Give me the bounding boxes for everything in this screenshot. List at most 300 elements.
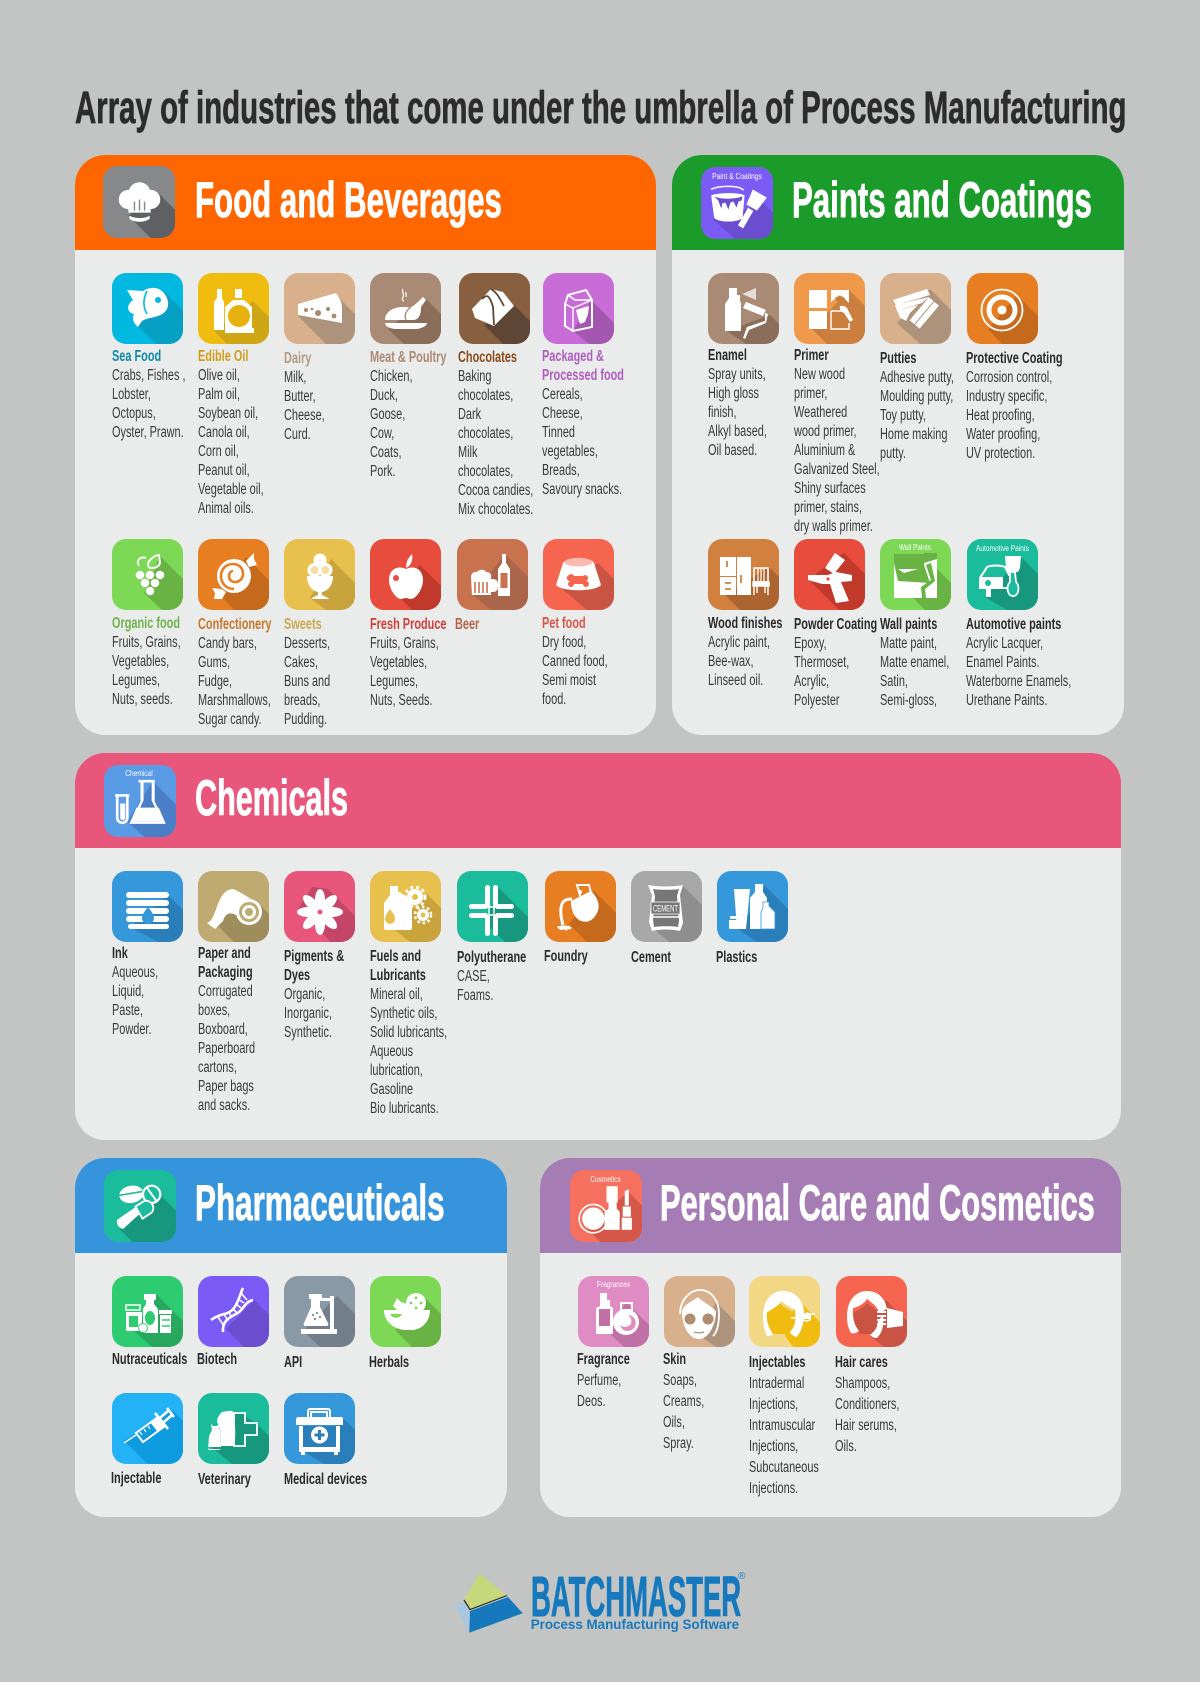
header band: Food and Beverages <box>75 155 656 250</box>
label: Dairy: Butter, <box>284 388 316 405</box>
label: Fuels and Lubricants: Lubricants <box>370 967 426 984</box>
label: Paper and Packaging: Paper bags <box>198 1078 254 1095</box>
label: Wood finishes: Linseed oil. <box>708 672 763 689</box>
label: Fragrance: Fragrance <box>577 1351 630 1368</box>
label: Sea Food <box>112 348 185 441</box>
header band: Personal Care and Cosmetics <box>540 1158 1121 1253</box>
label: Primer: wood primer, <box>794 423 856 440</box>
item: API <box>284 1276 364 1372</box>
icon: apple <box>370 539 441 610</box>
label: Enamel <box>708 346 767 460</box>
item: Pet food <box>542 539 614 708</box>
label: Enamel: High gloss <box>708 385 759 402</box>
label: Meat and Poultry: Cow, <box>370 425 394 442</box>
label: Fuels and Lubricants: Aqueous <box>370 1043 413 1060</box>
label: Paper and Packaging: and sacks. <box>198 1097 250 1114</box>
label: Veterinary: Veterinary <box>198 1471 251 1488</box>
label: Sea Food: Sea Food <box>112 348 161 365</box>
label: Powder Coating: Polyester <box>794 692 839 709</box>
label: Sea Food: Octopus, <box>112 405 156 422</box>
item: Primer <box>794 273 874 519</box>
label: Wall paints: Wall paints <box>880 616 937 633</box>
label: Fuels and Lubricants <box>370 947 447 1118</box>
label: Chocolates: Cocoa candies, <box>458 482 534 499</box>
label: Wall paints <box>880 615 949 710</box>
label: Confectionery: Fudge, <box>198 673 232 690</box>
label: Injectable: Injectable <box>111 1470 162 1487</box>
label: Pet food <box>542 615 607 708</box>
icon: fish <box>112 273 183 344</box>
label: Wood finishes: Wood finishes <box>708 615 782 632</box>
label: Dairy: Cheese, <box>284 407 325 424</box>
label: Pet food: Dry food, <box>542 634 586 651</box>
label: Protective Coating: Water proofing, <box>966 426 1040 443</box>
icon: test tube and flask: Chemical <box>125 768 153 778</box>
label: Chocolates: chocolates, <box>458 425 513 442</box>
label: Hair cares: Shampoos, <box>835 1375 890 1392</box>
icon: window and brush <box>794 273 865 344</box>
icon: chocolate <box>459 273 530 344</box>
icon: syringe <box>112 1393 183 1464</box>
label: Wall paints: Matte enamel, <box>880 654 949 671</box>
label: Sweets: Cakes, <box>284 654 318 671</box>
icon: cement bag <box>631 871 702 942</box>
icon: plastic bottles <box>717 871 788 942</box>
label: Protective Coating: Corrosion control, <box>966 369 1052 386</box>
label: Primer: Weathered <box>794 404 847 421</box>
label: Wall paints: Satin, <box>880 673 908 690</box>
item: Veterinary <box>198 1393 278 1489</box>
label: Organic food: Nuts, seeds. <box>112 691 173 708</box>
label: Pet food: Semi moist <box>542 672 596 689</box>
label: Fuels and Lubricants: Bio lubricants. <box>370 1100 439 1117</box>
label: Sweets: Desserts, <box>284 635 330 652</box>
label: Dairy: Dairy <box>284 350 311 367</box>
icon: milk carton <box>543 273 614 344</box>
icon: roast chicken <box>370 273 441 344</box>
label: Confectionery: Candy bars, <box>198 635 257 652</box>
icon: test tube and flask <box>104 764 176 836</box>
label: Packaged and Processed food: Tinned <box>542 424 575 441</box>
icon: cabinet and chair <box>708 539 779 610</box>
label: Primer: New wood <box>794 366 845 383</box>
registered mark: ® <box>738 1571 745 1582</box>
label: Edible Oil: Edible Oil <box>198 348 248 365</box>
label: Polyutherane: CASE, <box>456 968 489 985</box>
icon: paper roll <box>198 871 269 942</box>
header band: Paints and Coatings <box>672 155 1124 250</box>
label: Skin <box>663 1349 704 1454</box>
heading: Paints and Coatings: Paints and Coatings <box>792 172 1092 228</box>
icon: hair and dryer <box>836 1276 906 1347</box>
label: Cement: Cement <box>631 949 671 966</box>
item: Fragrance <box>578 1276 658 1411</box>
label: Packaged and Processed food: Savoury snacks. <box>542 481 622 498</box>
label: Automotive paints: Automotive paints <box>966 616 1061 633</box>
label: Plastics: Plastics <box>716 949 758 966</box>
label: Sweets: Sweets <box>284 616 321 633</box>
label: Biotech: Biotech <box>197 1351 237 1368</box>
label: Packaged and Processed food: Cereals, <box>542 386 582 403</box>
icon: pets and cross <box>198 1393 269 1464</box>
label: Automotive paints: Waterborne Enamels, <box>966 673 1071 690</box>
label: Pet food: Canned food, <box>542 653 607 670</box>
label: Skin: Soaps, <box>663 1372 697 1389</box>
label: Putties <box>880 349 954 463</box>
panel: Paints and Coatings <box>672 155 1124 735</box>
label: Paper and Packaging: Packaging <box>198 964 252 981</box>
icon: cosmetics <box>570 1170 642 1242</box>
icon: cheese <box>284 273 355 344</box>
label: Fuels and Lubricants: Mineral oil, <box>370 986 423 1003</box>
label: Enamel: Oil based. <box>708 442 757 459</box>
label: Pigments and Dyes: Organic, <box>284 986 325 1003</box>
label: Paper and Packaging: Boxboard, <box>198 1021 248 1038</box>
icon: beer mug and bottle <box>457 539 528 610</box>
label: Protective Coating <box>966 349 1062 463</box>
label: Packaged and Processed food: Packaged & <box>542 348 604 365</box>
label: Edible Oil <box>198 348 263 517</box>
label: Edible Oil: Peanut oil, <box>198 462 249 479</box>
icon: grapes <box>112 539 183 610</box>
item: Fuels and Lubricants <box>370 871 450 1119</box>
header band: Pharmaceuticals <box>75 1158 507 1253</box>
label: Pet food: Pet food <box>542 615 585 632</box>
label: Packaged and Processed food: Breads, <box>542 462 579 479</box>
icon: dna helix <box>198 1276 269 1347</box>
label: Fresh Produce: Legumes, <box>370 673 418 690</box>
icon: pet bowl <box>543 539 614 610</box>
label: Confectionery: Marshmallows, <box>198 692 270 709</box>
label: Fresh Produce: Vegetables, <box>370 654 427 671</box>
label: Edible Oil: Vegetable oil, <box>198 481 263 498</box>
label: Packaged and Processed food: vegetables, <box>542 443 598 460</box>
item: Pigments and Dyes <box>284 871 364 1043</box>
label: Fragrance <box>577 1349 630 1412</box>
item: Cement <box>631 871 711 967</box>
label: Packaged and Processed food: Processed food <box>542 367 624 384</box>
icon: spray and roller <box>708 273 779 344</box>
label: Powder Coating: Epoxy, <box>794 635 826 652</box>
label: Enamel: Alkyl based, <box>708 423 767 440</box>
label: Sweets <box>284 616 330 728</box>
label: Fuels and Lubricants: Solid lubricants, <box>370 1024 447 1041</box>
label: Powder Coating <box>794 615 877 710</box>
label: Putties: Adhesive putty, <box>880 369 954 386</box>
label: Meat and Poultry: Chicken, <box>370 368 412 385</box>
icon: face mask <box>664 1276 734 1347</box>
icon: paint bucket and brush <box>701 167 773 239</box>
label: Meat and Poultry: Goose, <box>370 406 405 423</box>
item: Edible Oil <box>198 273 269 517</box>
label: Enamel: Enamel <box>708 347 747 364</box>
item: Skin <box>664 1276 744 1451</box>
label: Fresh Produce: Fruits, Grains, <box>370 635 438 652</box>
label: Ink <box>112 944 158 1039</box>
item: Foundry <box>545 871 625 967</box>
label: Edible Oil: Palm oil, <box>198 386 239 403</box>
label: Powder Coating: Powder Coating <box>794 616 877 633</box>
label: Edible Oil: Canola oil, <box>198 424 249 441</box>
label: Protective Coating: Protective Coating <box>966 350 1062 367</box>
label: Medical devices: Medical devices <box>284 1471 367 1488</box>
panel: Pharmaceuticals <box>75 1158 507 1517</box>
item: Sweets <box>284 539 355 728</box>
heading: Personal Care and Cosmetics: Personal Care and Cosmetics <box>660 1174 1095 1230</box>
label: Edible Oil: Animal oils. <box>198 500 253 517</box>
label: Chocolates: Chocolates <box>458 349 517 366</box>
item: Biotech <box>198 1276 278 1372</box>
label: Automotive paints: Enamel Paints. <box>966 654 1039 671</box>
label: Paper and Packaging <box>198 944 255 1115</box>
label: Fragrance: Perfume, <box>577 1372 621 1389</box>
label: Hair cares: Hair serums, <box>835 1417 897 1434</box>
label: Chocolates: chocolates, <box>458 387 513 404</box>
label: Wood finishes: Bee-wax, <box>708 653 754 670</box>
icon: ink stack <box>112 871 183 942</box>
label: Pigments and Dyes: Dyes <box>284 967 310 984</box>
label: Injectables: Intramuscular <box>748 1417 815 1434</box>
label: Injectables: Injectables <box>748 1354 805 1371</box>
icon: flask on stand <box>284 1276 355 1347</box>
tagline: Process Manufacturing Software <box>531 1616 739 1632</box>
item: Protective Coating <box>966 273 1046 445</box>
icon: oil bottles <box>198 273 269 344</box>
label: Organic food: Organic food <box>112 615 180 632</box>
item: Medical devices <box>284 1393 364 1489</box>
label: Sea Food: Crabs, Fishes , <box>112 367 185 384</box>
label: Organic food: Legumes, <box>112 672 160 689</box>
icon: chef hat <box>103 166 175 238</box>
icon: perfume bottles: Fragrances <box>596 1279 630 1289</box>
icon: pills <box>104 1170 176 1242</box>
icon: supplement bottles <box>112 1276 183 1347</box>
label: Confectionery: Confectionery <box>198 616 271 633</box>
label: Beer: Beer <box>455 616 480 633</box>
label: Powder Coating: Acrylic, <box>794 673 829 690</box>
label: Meat and Poultry: Pork. <box>370 463 395 480</box>
item: Plastics <box>717 871 797 967</box>
item: Chocolates <box>458 273 534 518</box>
label: Enamel: finish, <box>708 404 737 421</box>
item: Confectionery <box>198 539 272 728</box>
label: Primer <box>794 346 879 536</box>
item: Herbals <box>370 1276 450 1372</box>
icon: perfume bottles <box>578 1276 648 1347</box>
item: Hair cares <box>836 1276 916 1451</box>
item: Paper and Packaging <box>198 871 278 1119</box>
label: Dairy: Curd. <box>284 426 311 443</box>
label: Putties: Home making <box>880 426 947 443</box>
label: Pigments and Dyes: Inorganic, <box>284 1005 331 1022</box>
label: Fragrance: Deos. <box>577 1393 605 1410</box>
label: Confectionery: Sugar candy. <box>198 711 261 728</box>
icon: pyramid <box>450 1568 530 1636</box>
icon: polyurethane cross <box>457 871 528 942</box>
item: Dairy <box>284 273 355 443</box>
item: Automotive paints <box>966 539 1046 692</box>
item: Wood finishes <box>708 539 788 674</box>
label: Pigments and Dyes: Synthetic. <box>284 1024 331 1041</box>
label: Polyutherane <box>456 948 526 1005</box>
label: Injectables: Intradermal <box>748 1375 804 1392</box>
label: Wall paints: Semi-gloss, <box>880 692 937 709</box>
label: Confectionery <box>198 616 272 728</box>
label: Sweets: breads, <box>284 692 320 709</box>
panel: Personal Care and Cosmetics <box>540 1158 1121 1517</box>
label: Primer: Galvanized Steel, <box>794 461 879 478</box>
item: Wall paints <box>880 539 960 692</box>
icon: foundry ladle <box>545 871 616 942</box>
label: Injectables: Injections. <box>748 1480 798 1497</box>
label: Pet food: food. <box>542 691 566 708</box>
heading: Chemicals: Chemicals <box>195 770 348 826</box>
label: Edible Oil: Olive oil, <box>198 367 239 384</box>
label: Dairy <box>284 350 325 443</box>
label: Ink: Ink <box>112 945 128 962</box>
icon: first aid kit <box>284 1393 355 1464</box>
label: Skin: Skin <box>663 1351 686 1368</box>
label: Ink: Paste, <box>112 1002 143 1019</box>
heading: Pharmaceuticals: Pharmaceuticals <box>195 1174 445 1230</box>
label: Foundry: Foundry <box>544 948 588 965</box>
label: Primer: Primer <box>794 347 828 364</box>
icon: herbal bowl <box>370 1276 441 1347</box>
label: Packaged and Processed food <box>542 348 624 498</box>
label: Fuels and Lubricants: Synthetic oils, <box>370 1005 437 1022</box>
label: Paper and Packaging: Corrugated <box>198 983 252 1000</box>
label: Automotive paints: Urethane Paints. <box>966 692 1047 709</box>
label: Enamel: Spray units, <box>708 366 766 383</box>
header band: Chemicals <box>75 753 1121 848</box>
icon: car and brush <box>966 539 1038 610</box>
label: Putties: Toy putty, <box>880 407 926 424</box>
label: Fresh Produce: Fresh Produce <box>370 616 446 633</box>
label: Hair cares <box>835 1352 899 1457</box>
label: Organic food <box>112 615 181 708</box>
title: Array of industries that come under the umbrella of Process Manufacturing <box>75 82 1127 133</box>
icon: spray gun <box>794 539 865 610</box>
label: Polyutherane: Polyutherane <box>456 949 526 966</box>
icon: ice cream cup <box>284 539 355 610</box>
label: Wood finishes: Acrylic paint, <box>708 634 770 651</box>
label: Protective Coating: Industry specific, <box>966 388 1047 405</box>
icon: canister and gears <box>370 871 441 942</box>
label: Dairy: Milk, <box>284 369 306 386</box>
icon: putty strips <box>880 273 951 344</box>
label: Organic food: Vegetables, <box>112 653 169 670</box>
item: Fresh Produce <box>370 539 446 709</box>
panel: Food and Beverages <box>75 155 656 735</box>
label: Automotive paints <box>966 615 1071 710</box>
label: Injectables: Subcutaneous <box>748 1459 818 1476</box>
label: Meat and Poultry: Meat & Poultry <box>370 349 446 366</box>
label: Edible Oil: Corn oil, <box>198 443 238 460</box>
label: Edible Oil: Soybean oil, <box>198 405 258 422</box>
icon: target shield <box>966 273 1038 344</box>
label: Putties: putty. <box>880 445 906 462</box>
panel: Chemicals <box>75 753 1121 1140</box>
label: Putties: Putties <box>880 350 916 367</box>
label: Primer: dry walls primer. <box>794 518 873 535</box>
label: Hair cares: Oils. <box>835 1438 857 1455</box>
label: Paper and Packaging: cartons, <box>198 1059 237 1076</box>
label: Paper and Packaging: boxes, <box>198 1002 230 1019</box>
label: Fuels and Lubricants: Fuels and <box>370 948 421 965</box>
item: Injectables <box>749 1276 829 1494</box>
label: Fresh Produce: Nuts, Seeds. <box>370 692 432 709</box>
label: Sea Food: Oyster, Prawn. <box>112 424 184 441</box>
label: Injectables <box>748 1352 818 1499</box>
label: Nutraceuticals: Nutraceuticals <box>112 1351 187 1368</box>
label: Chocolates: Milk <box>458 444 478 461</box>
label: Primer: primer, <box>794 385 827 402</box>
label: Injectables: Injections, <box>748 1438 798 1455</box>
label: Organic food: Fruits, Grains, <box>112 634 181 651</box>
label: Chocolates: Baking <box>458 368 492 385</box>
label: Confectionery: Gums, <box>198 654 230 671</box>
label: Sweets: Buns and <box>284 673 330 690</box>
label: Protective Coating: Heat proofing, <box>966 407 1034 424</box>
icon: wall and roller: Wall Paints <box>899 542 931 552</box>
brand name: BATCHMASTER <box>530 1564 741 1628</box>
label: Meat and Poultry <box>370 349 446 480</box>
item: Powder Coating <box>794 539 874 692</box>
label: Packaged and Processed food: Cheese, <box>542 405 582 422</box>
item: Enamel <box>708 273 779 459</box>
label: Wall paints: Matte paint, <box>880 635 937 652</box>
label: Fuels and Lubricants: Gasoline <box>370 1081 413 1098</box>
item: Injectable <box>112 1393 192 1489</box>
label: Hair cares: Hair cares <box>835 1354 888 1371</box>
icon: candy <box>198 539 269 610</box>
label: Automotive paints: Acrylic Lacquer, <box>966 635 1043 652</box>
icon: wall and roller <box>880 539 951 610</box>
label: Sea Food: Lobster, <box>112 386 151 403</box>
item: Organic food <box>112 539 183 708</box>
icon: cement bag: CEMENT <box>653 904 678 914</box>
label: Ink: Liquid, <box>112 983 144 1000</box>
label: Skin: Oils, <box>663 1414 685 1431</box>
logo: BatchMaster <box>450 1568 746 1636</box>
label: Wood finishes <box>708 614 782 690</box>
label: Injectables: Injections, <box>748 1396 798 1413</box>
label: Pigments and Dyes: Pigments & <box>284 948 344 965</box>
label: Powder Coating: Thermoset, <box>794 654 849 671</box>
label: Skin: Creams, <box>663 1393 704 1410</box>
item: Packaged and Processed food <box>542 273 624 498</box>
icon: flower <box>284 871 355 942</box>
label: Meat and Poultry: Coats, <box>370 444 401 461</box>
label: Pigments and Dyes <box>284 947 344 1042</box>
heading: Food and Beverages: Food and Beverages <box>195 172 502 228</box>
label: Polyutherane: Foams. <box>456 987 493 1004</box>
label: Meat and Poultry: Duck, <box>370 387 397 404</box>
label: Ink: Powder. <box>112 1021 151 1038</box>
label: Putties: Moulding putty, <box>880 388 953 405</box>
item: Ink <box>112 871 192 1043</box>
label: Herbals: Herbals <box>369 1354 410 1371</box>
item: Nutraceuticals <box>112 1276 192 1372</box>
item: Meat and Poultry <box>370 273 446 480</box>
label: Hair cares: Conditioners, <box>835 1396 899 1413</box>
label: Paper and Packaging: Paper and <box>198 945 251 962</box>
label: Chocolates <box>458 349 534 518</box>
label: Chocolates: Mix chocolates. <box>458 501 534 518</box>
label: API: API <box>284 1354 302 1371</box>
label: Fuels and Lubricants: lubrication, <box>370 1062 423 1079</box>
label: Sweets: Pudding. <box>284 711 327 728</box>
